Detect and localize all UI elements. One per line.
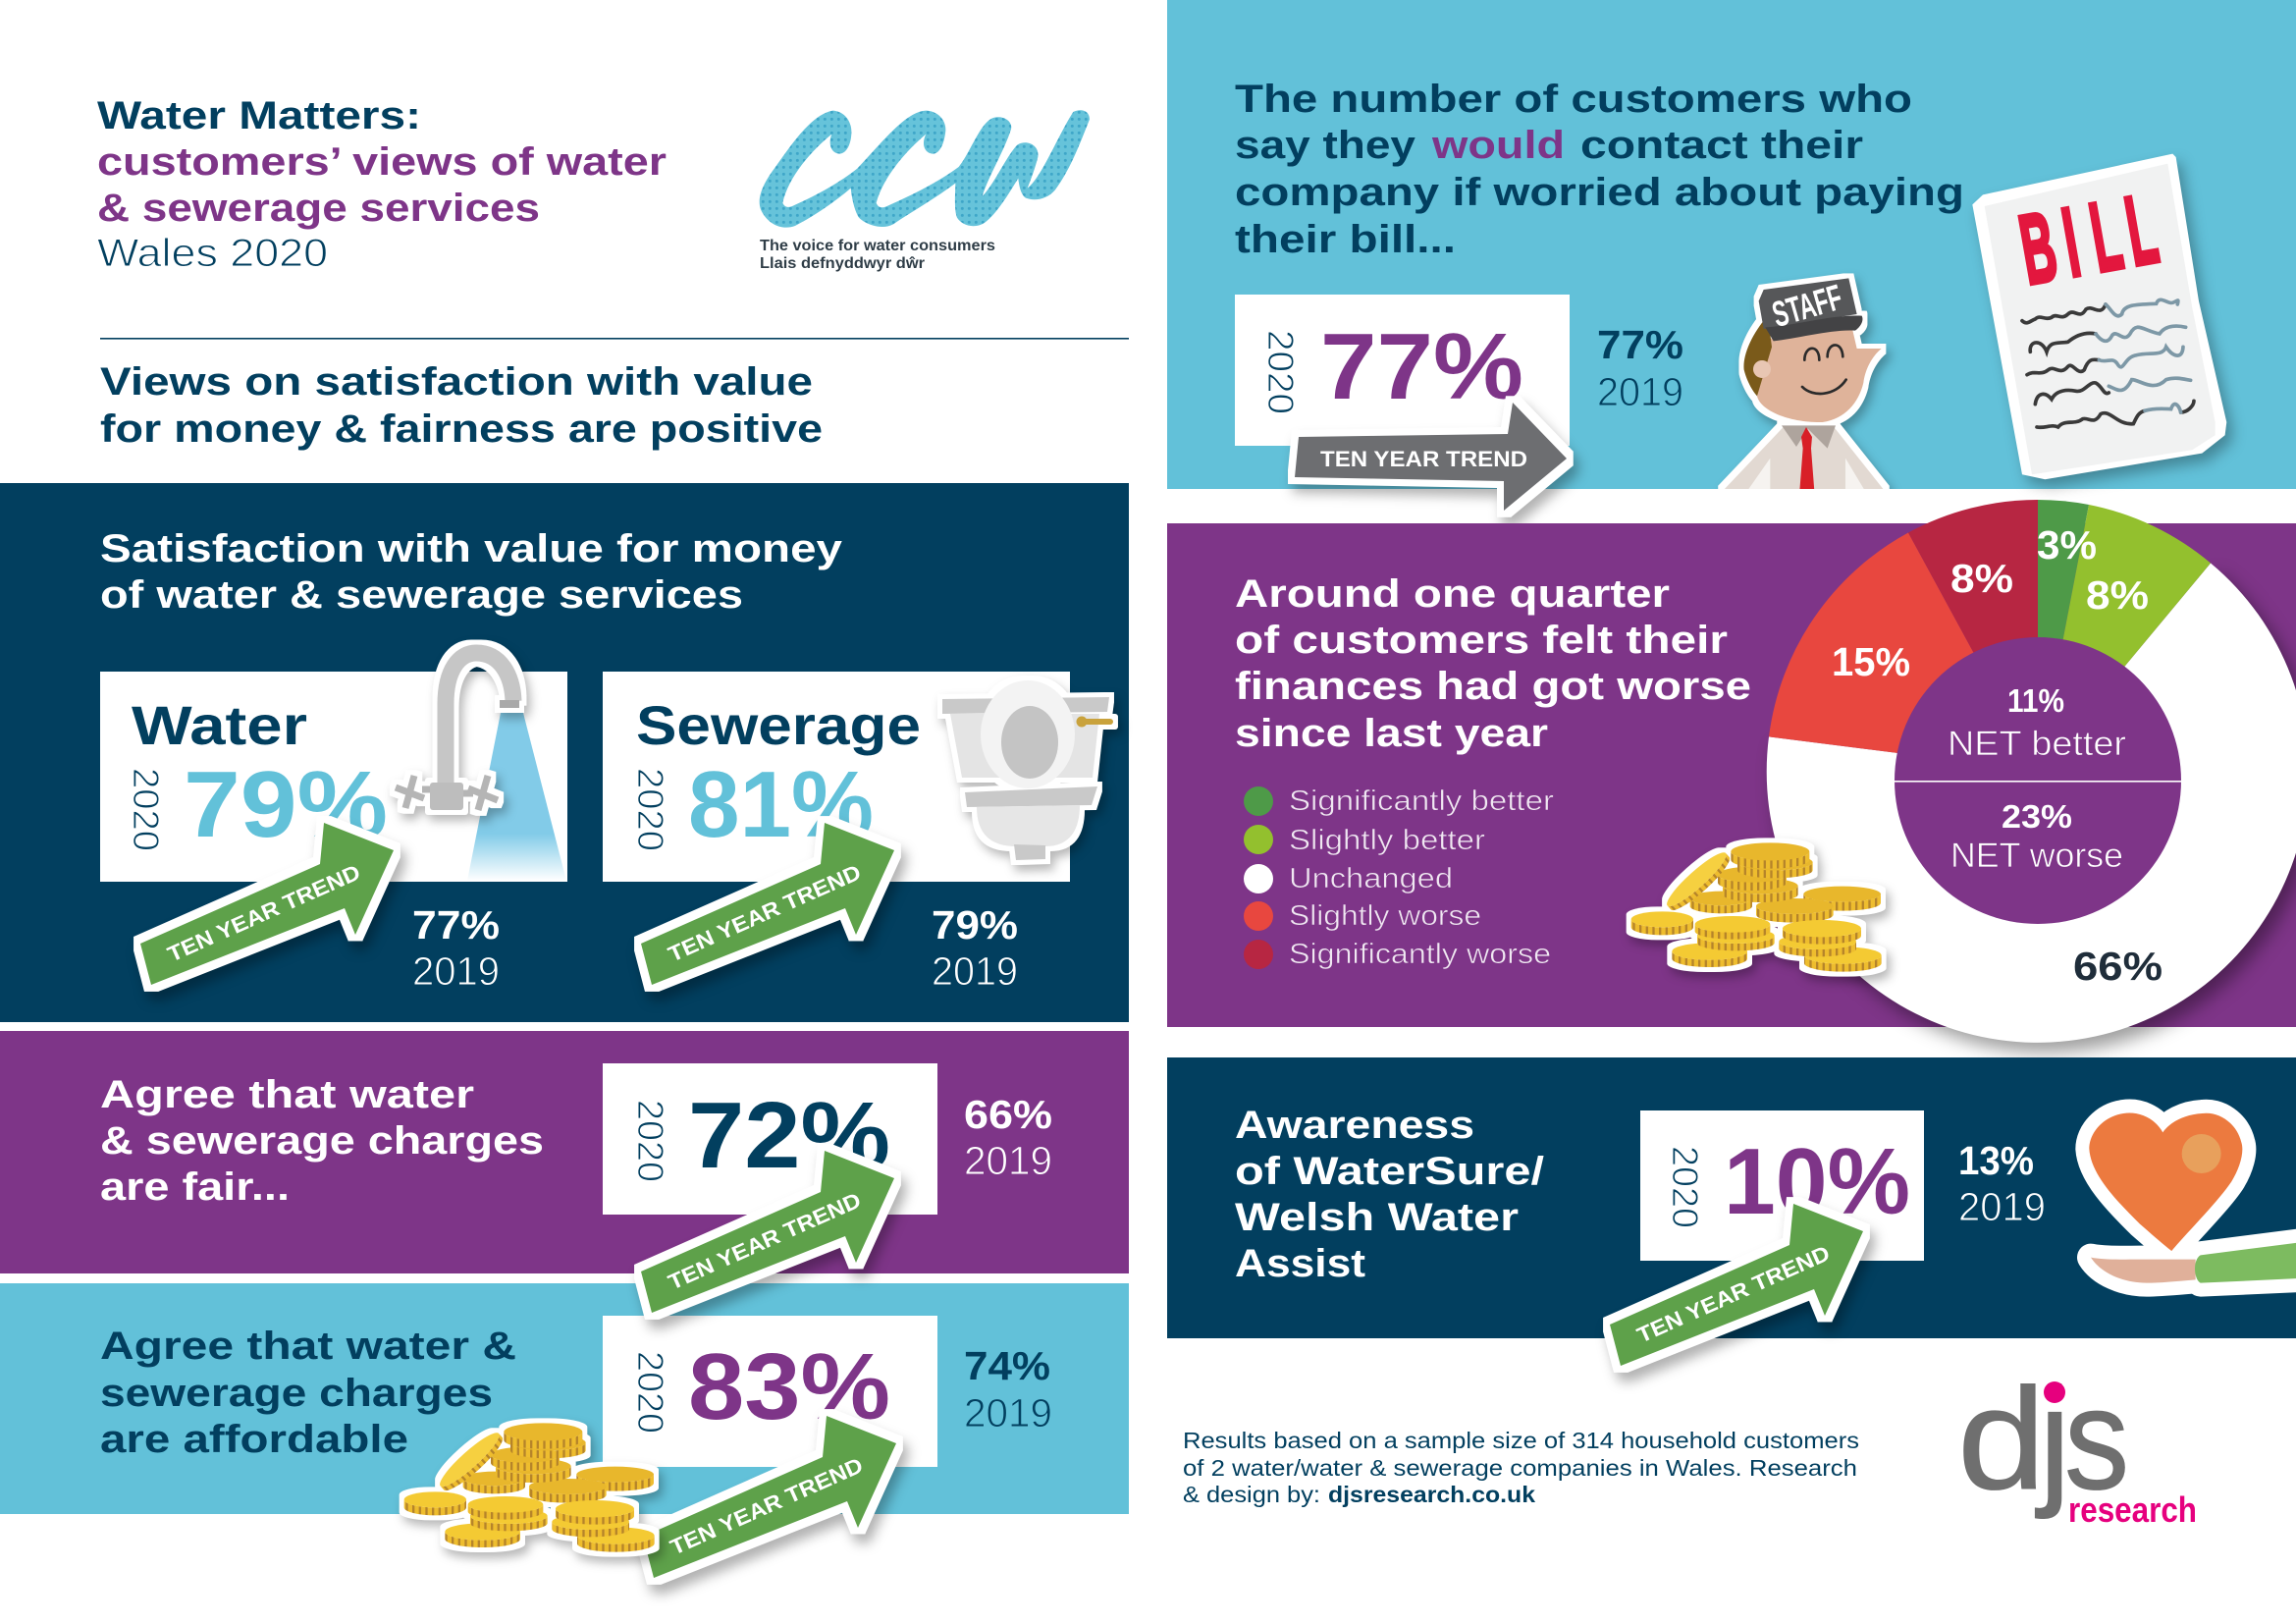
NET better xyxy=(1948,682,2126,763)
water 2019 figure: 77% xyxy=(412,902,500,947)
panel: finances compared with last year xyxy=(1167,523,2296,1027)
card: 83%: 2020 xyxy=(630,1351,670,1434)
legend: Significantly better xyxy=(1289,785,1554,817)
statement text: are affordable xyxy=(100,1418,408,1461)
arrow: water ten year trend: TEN YEAR TREND xyxy=(164,860,364,967)
2019 figure: 2019 xyxy=(964,1138,1052,1183)
sewerage 2019 figure xyxy=(932,902,1018,994)
legend: Unchanged xyxy=(1289,863,1453,894)
2019 figure: 74% xyxy=(964,1343,1050,1388)
NET worse: NET worse xyxy=(1950,837,2123,875)
logo: CCW xyxy=(760,110,1090,272)
logo: djs research: j xyxy=(2035,1359,2071,1520)
icon: heart on hand xyxy=(2089,1113,2296,1283)
card: 10%: 2020 xyxy=(1665,1146,1705,1228)
panel heading: Welsh Water xyxy=(1235,1196,1519,1239)
panel heading: since last year xyxy=(1235,712,1548,755)
sewerage 2019 figure: 79% xyxy=(932,902,1018,947)
logo: djs research xyxy=(1957,1358,2197,1530)
donut chart: change in finances xyxy=(1767,500,2296,1043)
title block: customers’ views of water xyxy=(97,140,667,184)
panel heading: contact their xyxy=(1580,124,1863,167)
icon: bill xyxy=(1972,154,2226,479)
title block xyxy=(97,94,667,275)
panel heading: Satisfaction with value for money xyxy=(100,527,843,570)
2019 figure: 13% xyxy=(1958,1138,2034,1183)
panel heading: of customers felt their xyxy=(1235,619,1728,662)
statement text: sewerage charges xyxy=(100,1372,493,1415)
title block: & sewerage services xyxy=(97,187,540,230)
slice: significantly worse xyxy=(1908,500,2038,771)
slice: unchanged xyxy=(1767,564,2296,1043)
panel heading: of WaterSure/ xyxy=(1235,1150,1544,1193)
arrow: awareness ten year trend xyxy=(1610,1204,1863,1366)
panel: awareness of WaterSure xyxy=(1167,1057,2296,1338)
arrow: fair ten year trend: TEN YEAR TREND xyxy=(665,1188,865,1295)
card: sewerage: Sewerage xyxy=(636,694,921,756)
2019 figure: 66% xyxy=(964,1092,1052,1137)
slice labels xyxy=(1832,522,2163,989)
card: 72%: 2020 xyxy=(630,1100,670,1182)
icon: coins left xyxy=(404,1423,655,1552)
heading: views on satisfaction: Views on satisfaction with value xyxy=(100,360,813,404)
panel heading: say they xyxy=(1235,124,1416,167)
NET better: 11% xyxy=(2007,682,2064,719)
2019 figure xyxy=(1958,1138,2046,1229)
statement text: Agree that water xyxy=(100,1073,474,1116)
legend: Slightly worse xyxy=(1289,900,1481,932)
icon: staff member xyxy=(1723,277,1885,491)
footnote: Results based on a sample size of 314 household customers xyxy=(1183,1428,1859,1453)
NET worse: 23% xyxy=(2002,798,2072,835)
panel: satisfaction with value for money xyxy=(0,483,1129,1022)
panel heading: Assist xyxy=(1235,1242,1365,1285)
panel heading: company if worried about paying xyxy=(1235,171,1964,214)
slice: significantly better xyxy=(2038,500,2089,771)
arrow: sewerage ten year trend xyxy=(641,823,894,985)
panel: charges are fair xyxy=(0,1031,1129,1273)
title block: Water Matters: xyxy=(97,94,421,137)
arrow: fair ten year trend xyxy=(641,1151,894,1313)
slice labels: 8% xyxy=(1950,556,2013,601)
card: 10% xyxy=(1640,1110,1924,1261)
icon: coins right xyxy=(1631,842,1882,972)
arrow: water ten year trend xyxy=(140,823,394,985)
2019 figure xyxy=(964,1343,1052,1435)
slice labels: 3% xyxy=(2037,522,2097,568)
card: 77% xyxy=(1235,295,1570,446)
footnote: djsresearch.co.uk xyxy=(1328,1482,1535,1507)
card: 83% xyxy=(603,1316,937,1467)
statement text: Agree that water & xyxy=(100,1325,516,1368)
legend xyxy=(1244,785,1554,970)
arrow: affordable ten year trend: TEN YEAR TREND xyxy=(667,1453,867,1560)
footnote: & design by: xyxy=(1183,1482,1320,1507)
card: 72%: 72% xyxy=(688,1083,890,1188)
panel heading xyxy=(1235,572,1751,755)
water 2019 figure xyxy=(412,902,500,994)
icon: staff member: STAFF xyxy=(1768,277,1846,335)
panel heading: would xyxy=(1431,124,1565,167)
2019 figure: 2019 xyxy=(1597,369,1683,414)
2019 figure xyxy=(964,1092,1052,1183)
slice labels: 15% xyxy=(1832,639,1910,684)
panel: charges are affordable xyxy=(0,1283,1129,1514)
card: sewerage: 2020 xyxy=(630,768,670,851)
title block: Wales 2020 xyxy=(97,232,328,275)
heading: views on satisfaction xyxy=(100,360,823,451)
logo: CCW: Llais defnyddwyr dŵr xyxy=(760,255,925,272)
panel heading: their bill... xyxy=(1235,218,1456,261)
NET worse xyxy=(1950,798,2123,875)
statement text xyxy=(100,1073,544,1209)
panel heading xyxy=(1235,78,1964,261)
statement text: are fair... xyxy=(100,1165,290,1209)
2019 figure: 2019 xyxy=(1958,1184,2046,1229)
2019 figure: 77% xyxy=(1597,322,1683,367)
sewerage 2019 figure: 2019 xyxy=(932,948,1018,994)
arrow: sewerage ten year trend: TEN YEAR TREND xyxy=(665,860,865,967)
legend: Slightly better xyxy=(1289,825,1485,856)
card: water: 2020 xyxy=(126,768,166,851)
icon: water cone xyxy=(467,713,566,881)
card: sewerage: 81% xyxy=(688,752,874,857)
logo: djs research: d xyxy=(1957,1358,2046,1519)
NET better: NET better xyxy=(1948,725,2126,763)
panel: contact company about bill xyxy=(1167,0,2296,489)
footnote: of 2 water/water & sewerage companies in Wales. Research xyxy=(1183,1455,1857,1481)
legend: Significantly worse xyxy=(1289,939,1551,970)
card: sewerage xyxy=(603,672,1070,882)
panel heading: Awareness xyxy=(1235,1104,1474,1147)
heading: views on satisfaction: for money & fairness are positive xyxy=(100,407,823,451)
card: 77%: 77% xyxy=(1320,314,1523,419)
footnote xyxy=(1183,1428,1859,1507)
2019 figure xyxy=(1597,322,1683,414)
statement text xyxy=(100,1325,516,1461)
2019 figure: 2019 xyxy=(964,1390,1052,1435)
panel heading: The number of customers who xyxy=(1235,78,1912,121)
panel heading: Around one quarter xyxy=(1235,572,1670,616)
arrow: bill ten year trend: TEN YEAR TREND xyxy=(1320,447,1527,471)
logo: djs research: s xyxy=(2064,1358,2129,1520)
panel heading xyxy=(100,527,843,617)
panel heading xyxy=(1235,1104,1544,1285)
logo: CCW: The voice for water consumers xyxy=(760,238,995,254)
panel heading: of water & sewerage services xyxy=(100,573,743,617)
slice labels: 66% xyxy=(2073,944,2163,989)
card: 83%: 83% xyxy=(688,1334,890,1439)
donut centre xyxy=(1895,637,2181,924)
card: water xyxy=(100,672,567,882)
card: 10%: 10% xyxy=(1724,1129,1910,1234)
water 2019 figure: 2019 xyxy=(412,948,500,994)
arrow: awareness ten year trend: TEN YEAR TREND xyxy=(1633,1241,1834,1348)
card: water: Water xyxy=(132,694,307,756)
slice: slightly better xyxy=(2038,505,2211,771)
icon: toilet xyxy=(942,680,1110,860)
panel heading: finances had got worse xyxy=(1235,665,1751,708)
icon: bill: BILL xyxy=(2012,173,2164,305)
arrow: bill ten year trend xyxy=(1295,403,1567,511)
card: 72% xyxy=(603,1063,937,1215)
card: water: 79% xyxy=(184,752,388,857)
arrow: affordable ten year trend xyxy=(643,1416,896,1578)
slice labels: 8% xyxy=(2086,572,2149,618)
statement text: & sewerage charges xyxy=(100,1119,544,1163)
slice: slightly worse xyxy=(1769,532,2038,771)
logo: djs research: research xyxy=(2068,1489,2197,1530)
card: 77%: 2020 xyxy=(1260,330,1301,414)
icon: tap xyxy=(396,653,519,810)
